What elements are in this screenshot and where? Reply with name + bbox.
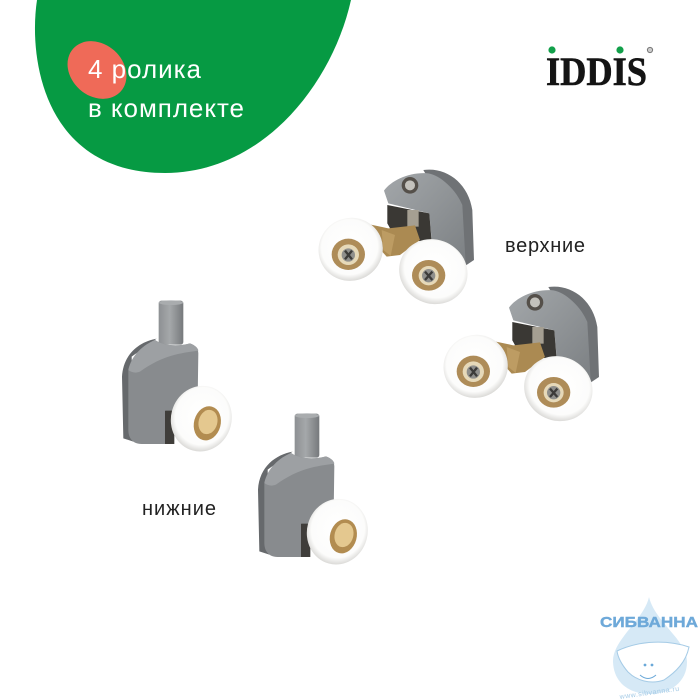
heading text: 4 ролика — [88, 54, 202, 84]
heading text — [88, 54, 244, 123]
watermark: Sibvanna logo — [600, 597, 698, 700]
upper rollers: second — [433, 287, 603, 432]
watermark: Sibvanna logo: СИБВАННА — [600, 614, 698, 631]
IDDIS logo: IDDIS — [546, 49, 647, 94]
upper rollers: first — [308, 170, 478, 315]
lower rollers: second — [258, 413, 375, 571]
lower rollers: first — [122, 300, 239, 458]
label: lower: нижние — [142, 498, 216, 520]
green blob header — [35, 0, 351, 173]
red accent blob — [56, 29, 138, 111]
label: upper: верхние — [505, 235, 585, 257]
heading text: в комплекте — [88, 93, 244, 123]
